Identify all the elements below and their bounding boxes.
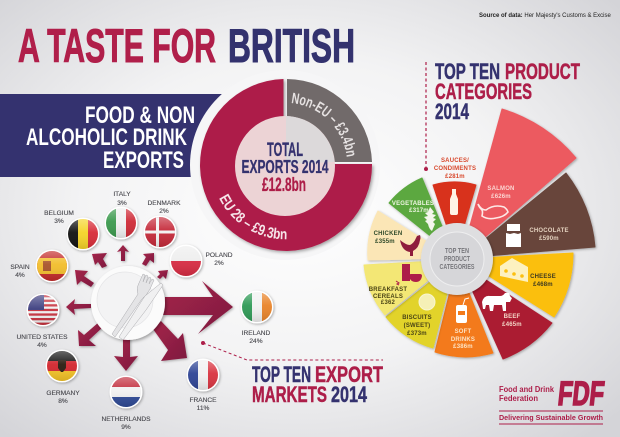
icon: cow (482, 293, 512, 311)
icon: cereal box and bowl (396, 264, 422, 285)
heading: top ten product categories: PRODUCT (505, 59, 580, 84)
label: Spain: 4% (15, 272, 25, 279)
heading: top ten export markets: EXPORT (315, 362, 383, 387)
label: United States: 4% (37, 342, 47, 349)
heading: top ten product categories (435, 59, 580, 124)
centre label: TOTAL (267, 140, 303, 161)
heading: top ten product categories: TOP TEN (435, 59, 500, 84)
title: A TASTE FOR (18, 19, 216, 72)
source of data note: Source of data: Her Majesty's Customs & Excise (479, 13, 612, 19)
icon: vegetable (424, 207, 436, 231)
market labels (10, 191, 271, 431)
label: breakfast cereals: BREAKFAST (369, 287, 407, 293)
centre label: EXPORTS 2014 (242, 157, 328, 177)
label: sauces: £281m (445, 174, 465, 180)
icon: biscuit (419, 294, 435, 310)
chart: product category wheel (364, 109, 595, 359)
donut chart: total exports (200, 78, 376, 254)
label: sauces: SAUCES/ (441, 158, 469, 164)
label: beef: £465m (502, 322, 522, 328)
wedge: breakfast cereals (364, 260, 453, 315)
label: salmon: £626m (491, 194, 511, 200)
icon: salmon (478, 204, 508, 219)
banner: food and non alcoholic drink exports: EXPORTS (103, 147, 184, 174)
banner: food and non alcoholic drink exports: ALCOHOLIC DRINK (26, 124, 187, 151)
label: chicken: £355m (375, 239, 395, 245)
logo: Food and Drink Federation: Federation (499, 393, 538, 403)
label: cheese: £468m (533, 282, 553, 288)
segment: EU 28 (200, 79, 372, 251)
label: Germany: 8% (58, 398, 68, 405)
dotted connector: export markets (203, 343, 383, 360)
label: soft drinks: £386m (453, 344, 473, 350)
label: cheese: CHEESE (530, 274, 556, 280)
logo: Food and Drink Federation: Delivering Sustainable Growth (499, 413, 603, 422)
flag: Belgium (66, 218, 100, 250)
wedge: beef (460, 263, 552, 359)
heading: top ten product categories: 2014 (435, 99, 470, 124)
knife (119, 283, 163, 340)
label: sauces: CONDIMENTS (434, 166, 476, 172)
plate: centre of wheel: CATEGORIES (440, 264, 475, 271)
wedge: chicken (368, 211, 453, 260)
label: biscuits: (SWEET) (404, 323, 430, 329)
arrow: Ireland (163, 281, 233, 334)
plate: centre of wheel (421, 223, 493, 295)
dotted connector marker (201, 341, 205, 345)
label: salmon: SALMON (487, 186, 515, 192)
label: beef: BEEF (504, 314, 520, 320)
label: Spain: SPAIN (10, 264, 30, 271)
flag: Poland (170, 244, 202, 278)
label: United States: UNITED STATES (16, 334, 68, 341)
logo: Food and Drink Federation (499, 375, 606, 424)
banner: food and non alcoholic drink exports (0, 70, 380, 260)
label: biscuits: £373m (407, 331, 427, 337)
flag: Italy (104, 206, 138, 240)
label: soft drinks: SOFT (455, 329, 471, 335)
label: Ireland: 24% (249, 338, 263, 345)
label: Germany: GERMANY (46, 390, 80, 397)
heading: top ten product categories: CATEGORIES (435, 79, 532, 104)
label: soft drinks: DRINKS (451, 337, 475, 343)
arrow: France (153, 321, 187, 361)
dotted connector: product categories (425, 62, 427, 167)
title: BRITISH (228, 19, 355, 72)
label: vegetables: VEGETABLES (392, 201, 434, 207)
wedge: vegetables (389, 178, 454, 255)
heading: top ten export markets: MARKETS (252, 382, 327, 407)
arrow: Netherlands (114, 337, 138, 371)
label: breakfast cereals: CEREALS (373, 294, 403, 300)
icon: cheese (500, 258, 528, 282)
label: breakfast cereals: £362 (381, 300, 396, 306)
fork (112, 274, 154, 337)
icon: chocolate bar (506, 224, 521, 247)
label: Ireland: IRELAND (242, 330, 270, 337)
label: EU 28: EU 28 – £9.3bn (219, 194, 286, 240)
label: chicken: CHICKEN (374, 231, 402, 237)
arrows from plate to markets (66, 245, 233, 371)
wedge: soft drinks (435, 263, 493, 357)
segment: Non-EU (287, 79, 372, 162)
label: Non-EU: Non-EU – £3.4bn (292, 92, 355, 157)
heading: top ten export markets: TOP TEN (252, 362, 311, 387)
flag: Denmark (144, 216, 176, 248)
wedge: sauces (433, 182, 476, 254)
plate: centre of wheel: PRODUCT (444, 256, 471, 263)
flag: Germany (46, 350, 78, 382)
arrow: Poland (157, 270, 168, 279)
label: Netherlands: NETHERLANDS (101, 416, 151, 423)
label: chocolate: CHOCOLATE (529, 228, 569, 234)
arrow: Denmark (142, 253, 154, 266)
logo: Food and Drink Federation: Food and Drink (499, 384, 554, 394)
label: Belgium: 3% (54, 218, 64, 225)
label: Belgium: BELGIUM (44, 210, 74, 217)
wedge: biscuits (386, 262, 455, 348)
label: Poland: 2% (214, 260, 224, 267)
centre circle (235, 116, 335, 216)
flag: France (186, 358, 220, 392)
icon: chicken (400, 235, 420, 256)
arrow: Spain (75, 270, 94, 287)
icon: ketchup bottle (450, 189, 458, 215)
plate: centre of wheel: TOP TEN (445, 248, 469, 255)
flag: Ireland (240, 290, 274, 324)
label: chocolate: £590m (539, 236, 559, 242)
label: biscuits: BISCUITS (402, 315, 432, 321)
arrow: Germany (78, 322, 103, 346)
icon: plate with knife and fork (91, 266, 165, 340)
centre label: £12.8bn (262, 175, 306, 196)
label: France: FRANCE (189, 397, 217, 404)
label: Poland: POLAND (205, 252, 233, 259)
dotted connector marker (424, 167, 428, 171)
arrow: Belgium (92, 253, 107, 268)
icon: soft drink (456, 298, 469, 323)
flag: Spain (36, 250, 68, 282)
flag: Netherlands (110, 376, 142, 408)
label: vegetables: £317m (409, 208, 429, 214)
label: Italy: ITALY (113, 191, 131, 198)
label: Denmark: 2% (159, 208, 169, 215)
label: Denmark: DENMARK (148, 200, 180, 207)
heading: top ten export markets: 2014 (331, 382, 368, 407)
label: Italy: 3% (117, 200, 127, 207)
arrow: Italy (117, 245, 129, 261)
wedge: cheese (462, 253, 573, 317)
label: France: 11% (197, 405, 209, 412)
wedge: salmon (461, 109, 576, 258)
label: Netherlands: 9% (121, 424, 131, 431)
centre label (242, 140, 328, 196)
wedge: chocolate (462, 173, 595, 258)
flag: United States (26, 294, 60, 326)
arrow: United States (66, 299, 91, 315)
banner: food and non alcoholic drink exports: FOOD & NON (85, 102, 195, 129)
heading: top ten export markets (252, 362, 383, 407)
